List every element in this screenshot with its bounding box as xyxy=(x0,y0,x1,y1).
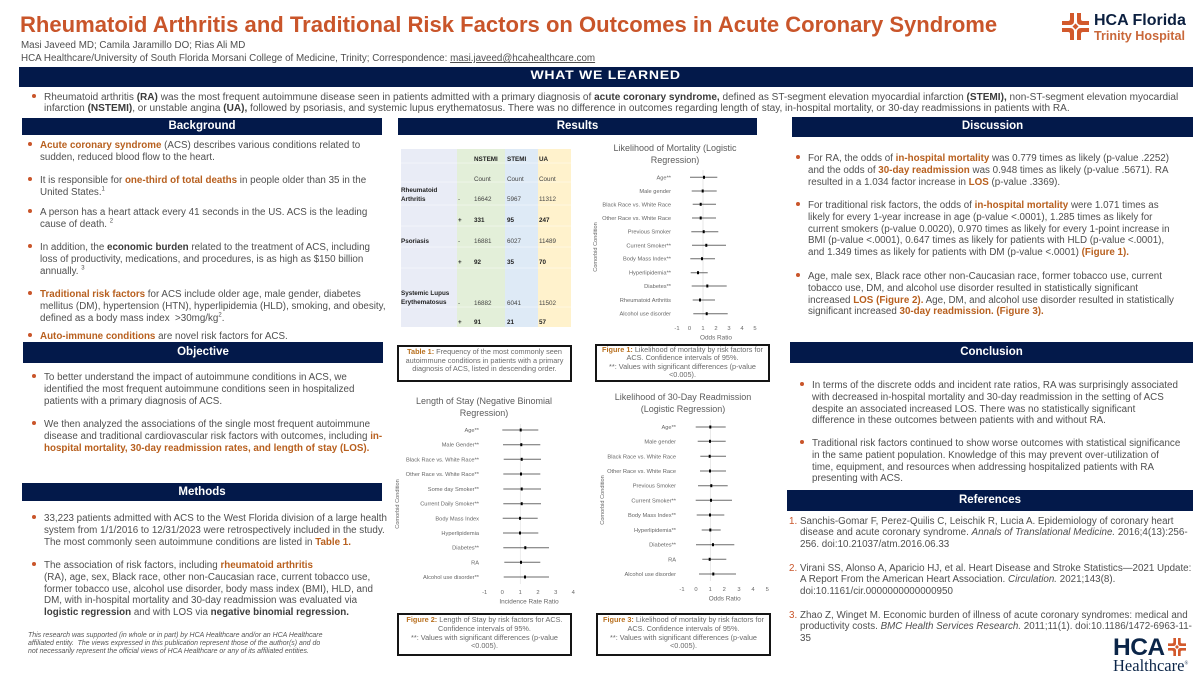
heading: objective: Objective xyxy=(177,346,229,358)
reference 1: disease and acute coronary syndrome. Annals of Translational Medicine. 2016;4(13):256- xyxy=(800,527,1188,538)
caption: figure 3: <0.005). xyxy=(670,641,697,650)
table: autoimmune condition frequency: Count xyxy=(474,176,491,183)
table: autoimmune condition frequency: Rheumatoid xyxy=(401,187,438,194)
heading: discussion: Discussion xyxy=(962,120,1023,132)
bullet: statistical analysis: former tobacco use, alcohol use disorder, body mass index (BMI), HLD, and xyxy=(44,584,373,595)
bullet: patient population: 33,223 patients admitted with ACS to the West Florida division of a large health xyxy=(44,513,387,524)
bullet: analysis of associations: hospital mortality, 30-day readmission rates, and length of stay (LOS). xyxy=(44,443,369,454)
chart: likelihood of mortality forest plot: Diabetes** xyxy=(644,284,672,290)
bullet: traditional risk factors: defined as a body mass index >30mg/kg2. xyxy=(40,312,224,324)
chart: likelihood of mortality forest plot: Rheumatoid Arthritis xyxy=(620,298,671,304)
chart: likelihood of mortality forest plot: -1 xyxy=(674,326,680,332)
chart: likelihood of mortality forest plot: Likelihood of Mortality (Logistic xyxy=(613,143,737,153)
authors and affiliation xyxy=(21,40,596,64)
chart: likelihood of mortality forest plot: Body Mass Index** xyxy=(623,257,672,263)
logo text: Healthcare: Healthcare® xyxy=(1113,656,1188,675)
bullet: traditional risk factor odds: For traditional risk factors, the odds of in-hospital mortality were 1.071 times as xyxy=(808,200,1159,211)
bullet: understanding the impact: To better understand the impact of autoimmune conditions in ACS, we xyxy=(44,372,347,383)
bullet: heart attack frequency: cause of death. 2 xyxy=(40,219,113,230)
bullet: RA outcome summary: In terms of the discrete odds and incident rate ratios, RA was surprisingly associated xyxy=(812,380,1178,391)
table: autoimmune condition frequency: Count xyxy=(539,176,556,183)
bullet: understanding the impact: patients with a primary diagnosis of ACS. xyxy=(44,396,222,407)
chart: length of stay forest plot: Incidence Rate Ratio xyxy=(499,598,559,606)
chart: likelihood of 30-day readmission forest plot: 3 xyxy=(737,587,741,593)
caption: table 1: diagnosis of ACS, listed in descending order. xyxy=(412,364,557,373)
heading: background: Background xyxy=(168,120,236,132)
caption: table 1: autoimmune conditions in patients with a primary xyxy=(406,356,563,365)
bullet: statistical analysis: logistic regression and with LOS via negative binomial regression. xyxy=(44,607,349,618)
caption: figure 3: Figure 3: Likelihood of mortality by risk factors for xyxy=(603,615,764,624)
bullet: patient population: system from 1/1/2016 to 12/31/2023 were retrospectively included in the study. xyxy=(44,525,385,536)
chart: likelihood of mortality forest plot: Previous Smoker xyxy=(628,230,671,236)
table: autoimmune condition frequency: Count xyxy=(507,176,524,183)
table: autoimmune condition frequency: 6041 xyxy=(507,300,522,307)
table: autoimmune condition frequency: + xyxy=(458,259,462,266)
chart: likelihood of 30-day readmission forest plot: Hyperlipidemia** xyxy=(634,528,677,534)
heading: objective xyxy=(23,342,383,363)
what we learned banner: WHAT WE LEARNED xyxy=(531,70,681,82)
reference 3: Zhao Z, Winget M. Economic burden of illness of acute coronary syndromes: medical and xyxy=(800,610,1188,620)
reference 1: 256. doi:10.21037/atm.2016.06.33 xyxy=(800,539,949,550)
heading: conclusion: Conclusion xyxy=(960,346,1023,358)
table: autoimmune condition frequency: 11312 xyxy=(539,196,557,203)
chart: likelihood of mortality forest plot: 0 xyxy=(688,326,691,332)
table: autoimmune condition frequency: Psoriasis xyxy=(401,238,430,245)
chart: likelihood of mortality forest plot: Current Smoker** xyxy=(626,243,672,249)
chart: length of stay forest plot: Regression) xyxy=(460,408,508,418)
chart: likelihood of 30-day readmission forest plot: Age** xyxy=(661,425,677,431)
bullet: one-third of deaths: United States.1 xyxy=(40,187,105,198)
table: autoimmune condition frequency: 11502 xyxy=(539,300,557,307)
bullet: traditional risk factor odds: likely for every 1-year increase in age (p-value <.0001), 1.285 times as likely for xyxy=(808,212,1152,223)
what we learned text: Rheumatoid arthritis (RA) was the most frequent autoimmune disease seen in patients admitted with a primary diagnosis of acute coronary syndrome, defined as ST-segment elevation myocardial infarction (STEMI), non-ST-segment elevation myocardial xyxy=(44,92,1178,102)
bullet: statistical analysis: The association of risk factors, including rheumatoid arthritis xyxy=(44,560,313,571)
caption: figure 1: Figure 1: Likelihood of mortality by risk factors for xyxy=(602,345,763,354)
chart: length of stay forest plot: Body Mass Index xyxy=(435,516,479,522)
chart: length of stay forest plot: Some day Smoker** xyxy=(428,487,480,493)
table: autoimmune condition frequency: + xyxy=(458,319,462,326)
panel: references: 2. xyxy=(789,562,797,574)
chart: likelihood of 30-day readmission forest plot: 4 xyxy=(751,587,755,593)
bullet: LOS and readmission factors: tobacco use, DM, and alcohol use disorder resulted in statistically significant xyxy=(808,283,1138,294)
bullet: heart attack frequency: A person has a heart attack every 41 seconds in the US. ACS is the leading xyxy=(40,207,367,218)
chart: length of stay forest plot: Hyperlipidemia xyxy=(441,531,480,537)
bullet: one-third of deaths xyxy=(40,175,366,199)
chart: likelihood of 30-day readmission forest plot: Diabetes** xyxy=(649,543,677,549)
chart: likelihood of mortality forest plot: 5 xyxy=(753,326,757,332)
bullet: economic burden xyxy=(40,242,370,277)
what we learned banner xyxy=(19,67,1193,87)
funding disclaimer: not necessarily represent the official views of HCA Healthcare or any of its affiliated entities. xyxy=(28,648,309,655)
chart: likelihood of 30-day readmission forest plot: RA xyxy=(668,557,676,563)
chart: likelihood of mortality forest plot: Other Race vs. White Race xyxy=(602,216,671,222)
table: autoimmune condition frequency: - xyxy=(458,196,460,203)
what we learned text: infarction (NSTEMI), or unstable angina (UA), followed by psoriasis, and systemic lupus erythematosus. There was no difference in outcomes regarding length of stay, in-hospital mortality, or 30-day readmissions in patients with RA. xyxy=(44,103,1070,114)
chart: length of stay forest plot: Diabetes** xyxy=(452,546,480,552)
logo wordmark: HCA Florida xyxy=(1094,12,1186,29)
bullet: patient population xyxy=(44,513,387,548)
bullet: traditional risk factor odds: BMI (p-value <.0001), 0.647 times as likely for patients with HLD (p-value <.0001), xyxy=(808,235,1164,246)
chart: likelihood of 30-day readmission forest plot: Black Race vs. White Race xyxy=(607,454,676,460)
chart: length of stay forest plot: Comorbid Condition xyxy=(395,479,401,529)
bullet: one-third of deaths: It is responsible for one-third of total deaths in people older than 35 in the xyxy=(40,175,366,186)
panel: references: 3. xyxy=(789,610,797,620)
chart: likelihood of 30-day readmission forest plot: -1 xyxy=(679,587,685,593)
table: autoimmune condition frequency: UA xyxy=(539,156,549,163)
table: autoimmune condition frequency: 16881 xyxy=(474,238,492,245)
chart: length of stay forest plot xyxy=(395,396,576,606)
bullet: analysis of associations xyxy=(44,419,382,454)
table: autoimmune condition frequency: Systemic Lupus xyxy=(401,290,450,297)
chart: length of stay forest plot: RA xyxy=(471,560,479,566)
panel: references: 1. xyxy=(789,516,797,526)
chart: likelihood of 30-day readmission forest plot: 0 xyxy=(694,587,698,593)
bullet: RA outcome summary xyxy=(812,380,1178,427)
chart: length of stay forest plot: 0 xyxy=(501,590,504,596)
table: autoimmune condition frequency: 21 xyxy=(507,319,515,326)
reference 1: Sanchis-Gomar F, Perez-Quilis C, Leischik R, Lucia A. Epidemiology of coronary heart xyxy=(800,516,1174,526)
bullet: acute coronary syndrome xyxy=(40,140,360,164)
chart: likelihood of mortality forest plot: Comorbid Condition xyxy=(593,222,599,272)
chart: likelihood of mortality forest plot: Black Race vs. White Race xyxy=(602,202,671,208)
chart: likelihood of mortality forest plot: Odds Ratio xyxy=(700,334,732,342)
bullet: RA outcome summary: with decreased in-hospital mortality and 30-day readmission in the setting of ACS xyxy=(812,392,1164,403)
bullet: statistical analysis: DM, with in-hospital mortality and 30-day readmission was evaluated via xyxy=(44,595,357,606)
table: autoimmune condition frequency xyxy=(401,149,571,327)
chart: length of stay forest plot: 4 xyxy=(572,590,576,596)
caption: figure 2: **: Values with significant differences (p-value xyxy=(411,633,558,642)
bullet: analysis of associations: We then analyzed the associations of the single most frequent autoimmune xyxy=(44,419,370,430)
chart: likelihood of 30-day readmission forest plot: Previous Smoker xyxy=(633,484,676,490)
reference 3: productivity costs. BMC Health Services Research. 2011;11(1). doi:10.1186/1472-6963-11- xyxy=(800,621,1192,632)
chart: length of stay forest plot: Black Race vs. White Race** xyxy=(406,457,480,463)
authors and affiliation: HCA Healthcare/University of South Florida Morsani College of Medicine, Trinity; Correspondence: masi.javeed@hcahealthcare.com xyxy=(21,53,595,64)
table: autoimmune condition frequency: + xyxy=(458,217,462,224)
chart: likelihood of mortality forest plot: Alcohol use disorder xyxy=(619,312,671,318)
heading: results xyxy=(398,118,757,135)
chart: likelihood of 30-day readmission forest plot: Body Mass Index** xyxy=(628,513,677,519)
funding disclaimer xyxy=(28,632,322,655)
bullet: clinical significance: in the same patient population. Knowledge of this may prevent over-utilization of xyxy=(812,450,1159,461)
caption: table 1: Table 1: Frequency of the most commonly seen xyxy=(407,347,562,356)
bullet: clinical significance: presenting with ACS. xyxy=(812,473,903,484)
chart: likelihood of mortality forest plot: 2 xyxy=(714,326,718,332)
table: autoimmune condition frequency: 331 xyxy=(474,217,485,224)
reference 3: 35 xyxy=(800,633,811,644)
table: autoimmune condition frequency: 16882 xyxy=(474,300,492,307)
panel: objective xyxy=(23,342,383,454)
chart: likelihood of 30-day readmission forest plot: Alcohol use disorder xyxy=(624,572,676,578)
bullet: RA odds xyxy=(808,153,1169,188)
bullet: heart attack frequency xyxy=(40,207,367,231)
chart: likelihood of 30-day readmission forest plot: 5 xyxy=(766,587,769,593)
chart: likelihood of mortality forest plot: Male gender xyxy=(639,189,671,195)
chart: likelihood of mortality forest plot: 1 xyxy=(701,326,705,332)
chart: likelihood of mortality forest plot: 3 xyxy=(727,326,731,332)
chart: length of stay forest plot: -1 xyxy=(482,590,487,596)
bullet: auto-immune conditions: Auto-immune conditions are novel risk factors for ACS. xyxy=(40,331,288,342)
table: autoimmune condition frequency: 35 xyxy=(507,259,515,266)
bullet: RA outcome summary: difference in these outcomes between patients with and without RA. xyxy=(812,415,1106,426)
chart: likelihood of mortality forest plot xyxy=(593,143,757,342)
bullet: economic burden: loss of productivity, medications, and procedures, is as high as $150 billion xyxy=(40,254,363,265)
what we learned text xyxy=(44,92,1179,116)
chart: length of stay forest plot: Age** xyxy=(464,428,480,434)
bullet: economic burden: In addition, the economic burden related to the treatment of ACS, including xyxy=(40,242,370,253)
chart: length of stay forest plot: Alcohol use disorder** xyxy=(423,575,480,581)
caption: figure 2: Figure 2: Length of Stay by risk factors for ACS. xyxy=(406,615,563,624)
bullet: analysis of associations: disease and traditional cardiovascular risk factors with outcomes, including in- xyxy=(44,431,382,442)
chart: likelihood of 30-day readmission forest plot: Odds Ratio xyxy=(709,596,741,602)
chart: length of stay forest plot: Length of Stay (Negative Binomial xyxy=(416,396,552,406)
heading: references xyxy=(787,490,1193,511)
chart: length of stay forest plot: Current Daily Smoker** xyxy=(420,502,480,508)
chart: likelihood of mortality forest plot: Regression) xyxy=(651,155,699,165)
table: autoimmune condition frequency: - xyxy=(458,238,460,245)
bullet: clinical significance xyxy=(812,438,1180,485)
caption: figure 2: Confidence intervals of 95%. xyxy=(438,624,531,633)
bullet: traditional risk factors xyxy=(40,289,386,324)
chart: length of stay forest plot: Male Gender** xyxy=(442,443,480,449)
panel: discussion xyxy=(792,117,1193,317)
bullet: RA outcome summary: despite an associated increased LOS. There was no statistically significant xyxy=(812,404,1135,415)
authors and affiliation: Masi Javeed MD; Camila Jaramillo DO; Rias Ali MD xyxy=(21,40,245,51)
chart: likelihood of 30-day readmission forest plot: 2 xyxy=(723,587,726,593)
bullet: RA odds: and the odds of 30-day readmission was 0.948 times as likely (p-value .5671). RA xyxy=(808,165,1169,176)
heading: results: Results xyxy=(557,120,598,132)
bullet: statistical analysis: (RA), age, sex, Black race, other non-Caucasian race, current tobacco use, xyxy=(44,572,370,583)
heading: references: References xyxy=(959,494,1021,506)
funding disclaimer: This research was supported (in whole or in part) by HCA Healthcare and/or an HCA Healthcare xyxy=(28,632,322,639)
bullet: LOS and readmission factors: significant increased 30-day readmission. (Figure 3). xyxy=(808,306,1044,317)
heading: conclusion xyxy=(790,342,1193,363)
chart: length of stay forest plot: 1 xyxy=(519,590,522,596)
bullet: traditional risk factor odds: current smokers (p-value 0.0020), 0.970 times as likely for every 1-point increase in xyxy=(808,224,1170,235)
caption: figure 2 xyxy=(397,613,572,656)
chart: likelihood of 30-day readmission forest plot: Male gender xyxy=(644,439,676,445)
icon: orange cross xyxy=(1062,13,1089,40)
table: autoimmune condition frequency: STEMI xyxy=(507,156,526,163)
bullet: acute coronary syndrome: Acute coronary syndrome (ACS) describes various conditions related to xyxy=(40,140,360,151)
table: autoimmune condition frequency: 91 xyxy=(474,319,482,326)
panel: methods xyxy=(22,483,387,618)
table: autoimmune condition frequency: 247 xyxy=(539,217,550,224)
caption: figure 3: ACS. Confidence intervals of 95%. xyxy=(628,624,739,633)
reference 2: Virani SS, Alonso A, Aparicio HJ, et al. Heart Disease and Stroke Statistics—2021 Update: xyxy=(800,562,1191,574)
chart: likelihood of 30-day readmission forest plot xyxy=(600,392,769,602)
chart: likelihood of 30-day readmission forest plot: (Logistic Regression) xyxy=(641,404,725,414)
reference 3 xyxy=(789,610,1192,644)
table: autoimmune condition frequency: 92 xyxy=(474,259,482,266)
caption: figure 3 xyxy=(596,613,771,656)
icon: orange cross xyxy=(1168,638,1186,656)
logo: HCA Healthcare xyxy=(1113,634,1188,675)
chart: likelihood of 30-day readmission forest plot: Comorbid Condition xyxy=(600,475,606,525)
panel: conclusion xyxy=(790,342,1193,484)
chart: likelihood of mortality forest plot: 4 xyxy=(740,326,744,332)
caption: table 1 xyxy=(397,345,572,382)
bullet: traditional risk factor odds xyxy=(808,200,1170,259)
heading: discussion xyxy=(792,117,1193,137)
table: autoimmune condition frequency: 16642 xyxy=(474,196,492,203)
table: autoimmune condition frequency: - xyxy=(458,300,460,307)
caption: figure 1: **: Values with significant differences (p-value xyxy=(609,362,756,371)
bullet: RA odds: For RA, the odds of in-hospital mortality was 0.779 times as likely (p-value .2252) xyxy=(808,153,1169,164)
reference 2 xyxy=(789,562,1191,597)
table: autoimmune condition frequency: 57 xyxy=(539,319,547,326)
caption: figure 2: <0.005). xyxy=(471,641,498,650)
chart: likelihood of 30-day readmission forest plot: Other Race vs. White Race xyxy=(607,469,676,475)
bullet: clinical significance: time, equipment, and resources when addressing hospitalized patients with RA xyxy=(812,462,1154,473)
table: autoimmune condition frequency: Arthritis xyxy=(401,196,426,203)
heading: background xyxy=(22,118,382,135)
caption: figure 1 xyxy=(595,344,770,382)
reference 2: doi:10.1161/cir.0000000000000950 xyxy=(800,586,953,597)
caption: figure 1: ACS. Confidence intervals of 95%. xyxy=(627,353,738,362)
caption: figure 3: **: Values with significant differences (p-value xyxy=(610,633,757,642)
chart: likelihood of mortality forest plot: Hyperlipidemia** xyxy=(629,271,672,277)
logo text: HCA: HCA xyxy=(1113,634,1165,661)
bullet: patient population: The most commonly seen autoimmune conditions are listed in Table 1. xyxy=(44,537,351,548)
funding disclaimer: affiliated entity. The views expressed in this publication represent those of the author(s) and do xyxy=(28,640,320,647)
title: Rheumatoid Arthritis and Traditional Risk Factors on Outcomes in Acute Coronary Syndrome xyxy=(20,12,997,37)
table: autoimmune condition frequency: 11489 xyxy=(539,238,557,245)
logo wordmark: Trinity Hospital xyxy=(1094,29,1185,43)
bullet: clinical significance: Traditional risk factors continued to show worse outcomes with statistical significance xyxy=(812,438,1180,449)
chart: likelihood of mortality forest plot: Age** xyxy=(656,175,672,181)
logo wordmark xyxy=(1094,12,1186,43)
heading: methods xyxy=(22,483,382,501)
bullet: understanding the impact: identified the most frequent autoimmune conditions seen in hospitalized xyxy=(44,384,354,395)
logo: HCA Florida Trinity Hospital xyxy=(1062,12,1186,43)
bullet: LOS and readmission factors: increased LOS (Figure 2). Age, DM, and alcohol use disorder resulted in statistically xyxy=(808,295,1174,306)
reference 2: A Report From the American Heart Association. Circulation. 2021;143(8). xyxy=(800,574,1115,585)
chart: length of stay forest plot: 3 xyxy=(554,590,557,596)
table: autoimmune condition frequency: 95 xyxy=(507,217,515,224)
table: autoimmune condition frequency: Erythematosus xyxy=(401,299,447,306)
chart: length of stay forest plot: Other Race vs. White Race** xyxy=(406,472,480,478)
reference 1 xyxy=(789,516,1188,550)
chart: length of stay forest plot: 2 xyxy=(536,590,540,596)
table: autoimmune condition frequency: 70 xyxy=(539,259,547,266)
bullet: traditional risk factor odds: and 1.349 times as likely for patients with DM (p-value <.0001) (Figure 1). xyxy=(808,247,1129,258)
table: autoimmune condition frequency: NSTEMI xyxy=(474,156,498,163)
heading: methods: Methods xyxy=(178,486,226,498)
table: autoimmune condition frequency: 5967 xyxy=(507,196,522,203)
caption: figure 1: <0.005). xyxy=(669,370,696,379)
chart: likelihood of 30-day readmission forest plot: Likelihood of 30-Day Readmission xyxy=(615,392,751,402)
table: autoimmune condition frequency: 6027 xyxy=(507,238,522,245)
panel: background xyxy=(22,118,386,342)
bullet: understanding the impact xyxy=(44,372,354,407)
chart: likelihood of 30-day readmission forest plot: 1 xyxy=(709,587,712,593)
bullet: acute coronary syndrome: sudden, reduced blood flow to the heart. xyxy=(40,152,215,163)
bullet: traditional risk factors: Traditional risk factors for ACS include older age, male gender, diabetes xyxy=(40,289,361,300)
bullet: economic burden: annually. 3 xyxy=(40,265,85,277)
bullet: statistical analysis xyxy=(44,560,373,619)
chart: likelihood of 30-day readmission forest plot: Current Smoker** xyxy=(631,498,677,504)
bullet: LOS and readmission factors xyxy=(808,271,1174,318)
bullet: LOS and readmission factors: Age, male sex, Black race other non-Caucasian race, former tobacco use, current xyxy=(808,271,1162,282)
bullet: traditional risk factors: mellitus (DM), hypertension (HTN), hyperlipidemia (HLD), smoking, and obesity, xyxy=(40,301,386,312)
bullet: RA odds: resulted in a 1.034 factor increase in LOS (p-value .3369). xyxy=(808,177,1060,188)
panel: references xyxy=(787,490,1193,644)
